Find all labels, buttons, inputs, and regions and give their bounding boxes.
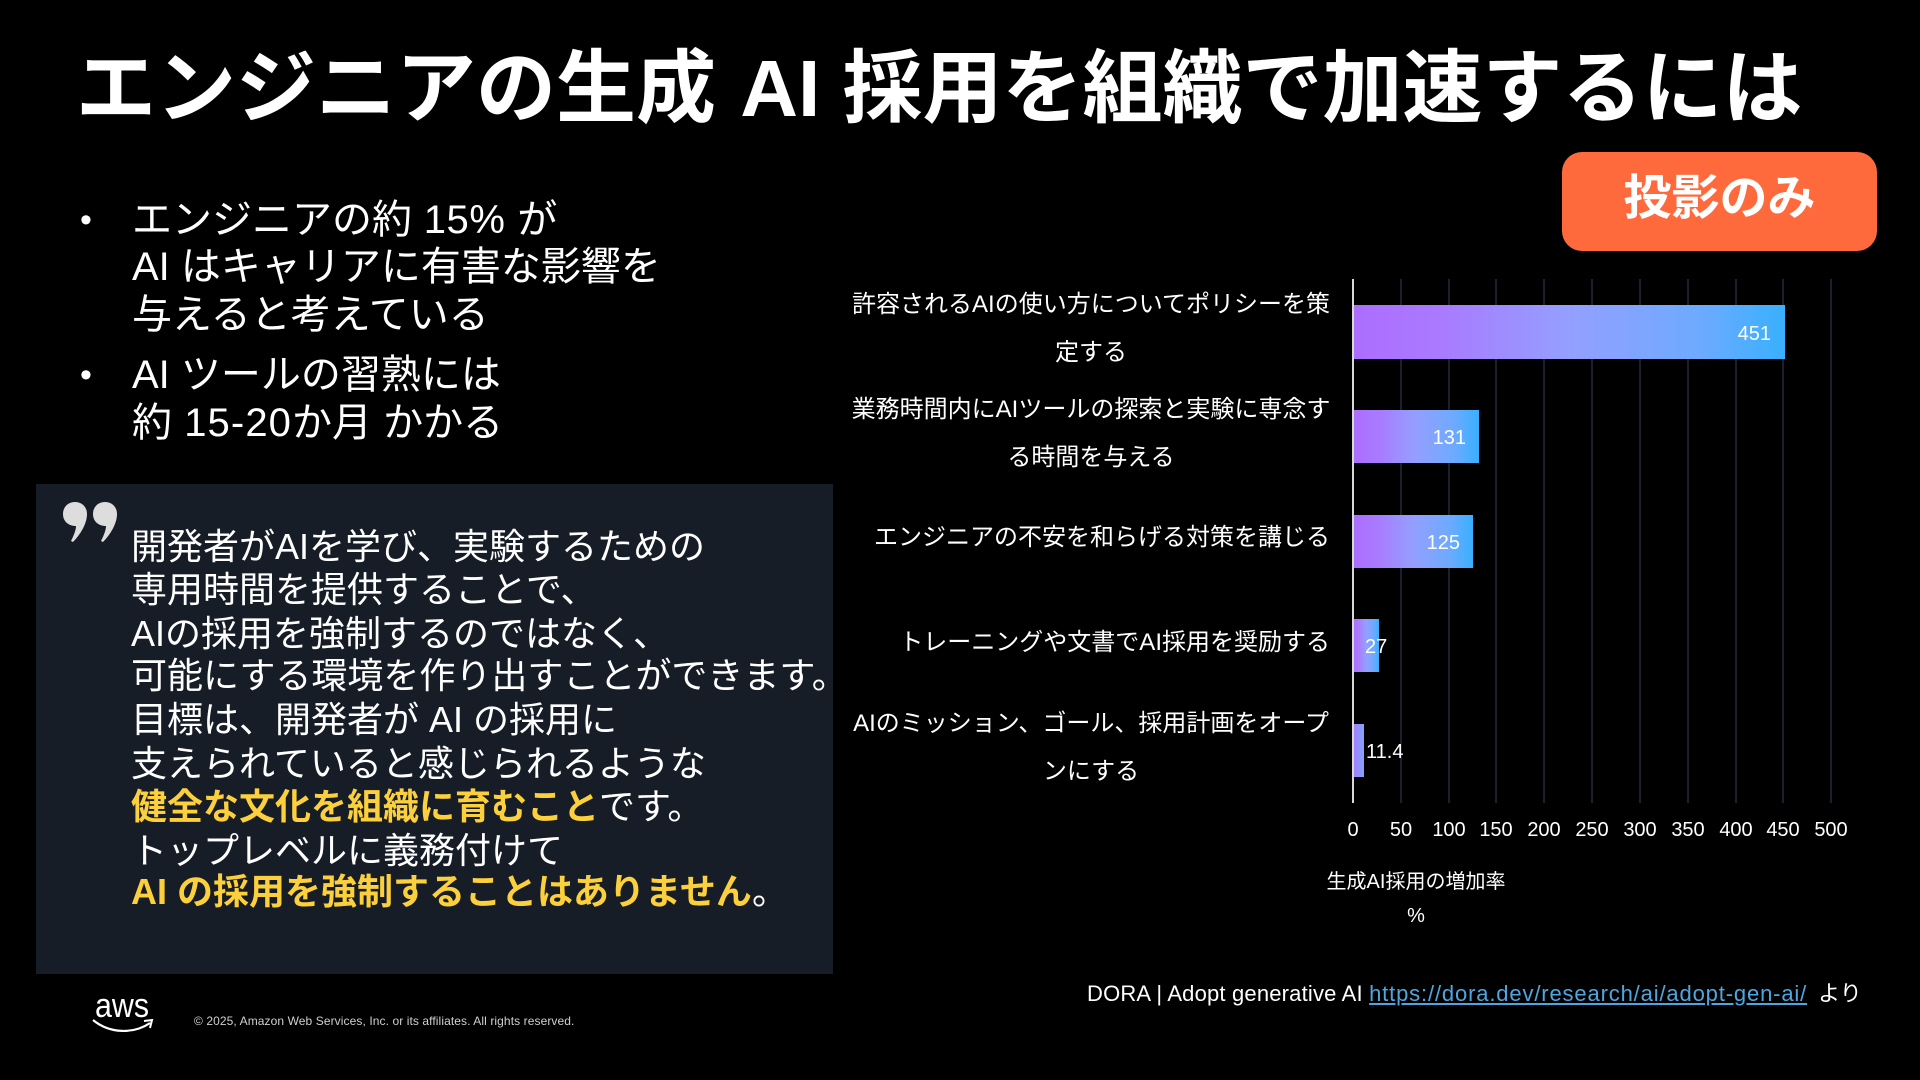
bullet list: AI はキャリアに有害な影響を bbox=[132, 245, 661, 289]
x axis tick labels: 100 bbox=[1432, 819, 1466, 841]
quote text: 支えられていると感じられるような bbox=[131, 743, 706, 784]
x axis tick labels: 500 bbox=[1814, 819, 1848, 841]
badge: projection only: 投影のみ bbox=[1623, 172, 1816, 225]
quote text: AIの採用を強制するのではなく、 bbox=[131, 613, 669, 654]
x axis tick labels: 250 bbox=[1575, 819, 1609, 841]
category labels: AIのミッション、ゴール、採用計画をオープ bbox=[853, 710, 1329, 737]
bar: reduce anxiety 125 bbox=[1353, 515, 1473, 568]
bar: training 27: 27 bbox=[1365, 636, 1387, 658]
bar chart bbox=[852, 279, 1848, 927]
title: エンジニアの生成 AI 採用を組織で加速するには bbox=[76, 44, 1802, 133]
quote text: 開発者がAIを学び、実験するための bbox=[131, 526, 705, 567]
bar: dedicated time 131: 131 bbox=[1433, 427, 1466, 449]
quote text bbox=[131, 526, 848, 912]
category labels bbox=[852, 291, 1330, 785]
x axis tick labels: 450 bbox=[1766, 819, 1800, 841]
x axis title: % bbox=[1407, 905, 1425, 927]
badge: projection only bbox=[1562, 152, 1877, 251]
x axis tick labels: 150 bbox=[1479, 819, 1513, 841]
category labels: トレーニングや文書でAI採用を奨励する bbox=[899, 629, 1330, 656]
category labels: エンジニアの不安を和らげる対策を講じる bbox=[874, 524, 1330, 551]
category labels: 定する bbox=[1055, 339, 1127, 366]
panel: quote bbox=[36, 484, 833, 974]
quote text: 専用時間を提供することで、 bbox=[131, 569, 596, 610]
bar: mission 11.4 bbox=[1353, 724, 1403, 777]
quote text: 可能にする環境を作り出すことができます。 bbox=[131, 655, 848, 696]
category labels: ンにする bbox=[1043, 758, 1139, 785]
quote text: トップレベルに義務付けて bbox=[131, 830, 563, 871]
icon: quotation mark bbox=[63, 502, 117, 542]
quote text: AI の採用を強制することはありません。 bbox=[131, 871, 788, 912]
bar: policy 451: 451 bbox=[1738, 323, 1771, 345]
x axis tick labels: 200 bbox=[1527, 819, 1561, 841]
quote text: 健全な文化を組織に育むことです。 bbox=[131, 786, 703, 827]
bullet list: • bbox=[80, 201, 92, 239]
bar: policy 451 bbox=[1353, 305, 1785, 359]
bullet list: エンジニアの約 15% が bbox=[132, 198, 557, 242]
copyright: © 2025, Amazon Web Services, Inc. or its affiliates. All rights reserved. bbox=[194, 1014, 574, 1028]
x axis tick labels: 400 bbox=[1719, 819, 1753, 841]
category labels: る時間を与える bbox=[1007, 444, 1175, 471]
bullet list: • bbox=[80, 356, 92, 394]
x axis tick labels: 300 bbox=[1623, 819, 1657, 841]
category labels: 業務時間内にAIツールの探索と実験に専念す bbox=[852, 396, 1330, 423]
x axis title: 生成AI採用の増加率 bbox=[1327, 870, 1505, 893]
bullet list: AI ツールの習熟には bbox=[132, 353, 501, 397]
bullet list: 与えると考えている bbox=[132, 293, 489, 337]
bullet list: 約 15-20か月 かかる bbox=[132, 401, 503, 445]
source citation: DORA | Adopt generative AI https://dora.dev/research/ai/adopt-gen-ai/ より bbox=[1087, 981, 1862, 1006]
x axis tick labels: 350 bbox=[1671, 819, 1705, 841]
category labels: 許容されるAIの使い方についてポリシーを策 bbox=[852, 291, 1330, 318]
x axis tick labels bbox=[1347, 819, 1848, 841]
x axis title bbox=[1327, 870, 1505, 927]
quote text: 目標は、開発者が AI の採用に bbox=[131, 699, 617, 740]
bar: reduce anxiety 125: 125 bbox=[1427, 532, 1460, 554]
bullet list bbox=[80, 198, 661, 445]
x axis tick labels: 50 bbox=[1390, 819, 1412, 841]
bar: dedicated time 131 bbox=[1353, 410, 1479, 463]
bar: mission 11.4: 11.4 bbox=[1366, 741, 1403, 763]
bar: training 27 bbox=[1353, 619, 1387, 672]
x axis tick labels: 0 bbox=[1347, 819, 1359, 841]
